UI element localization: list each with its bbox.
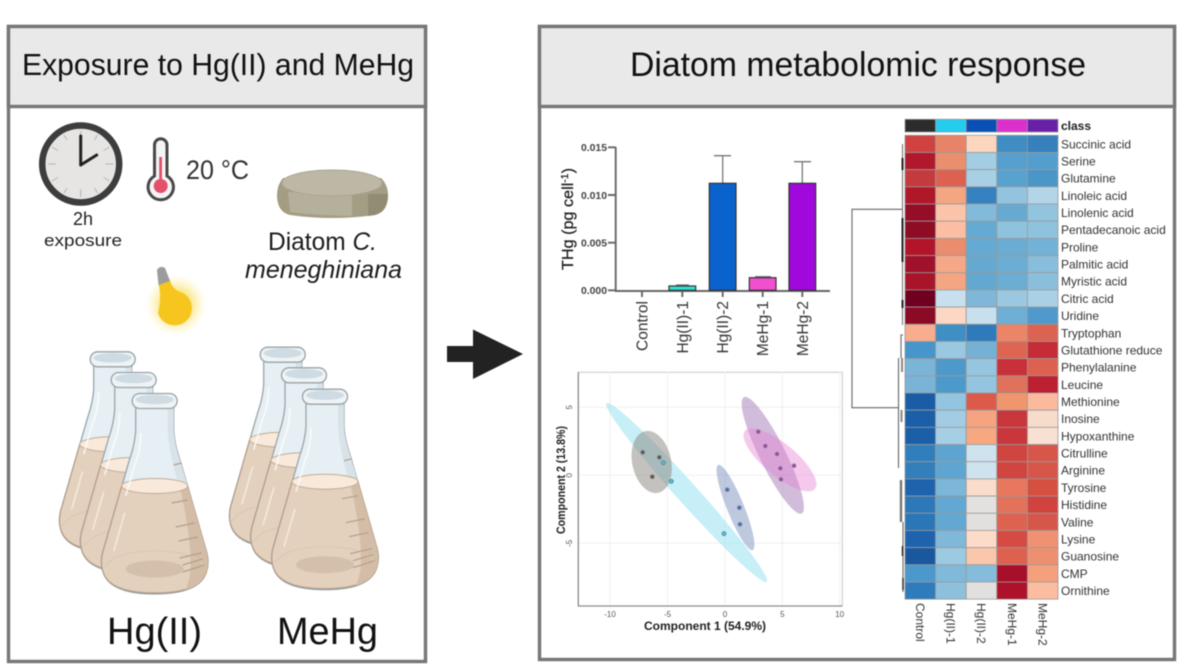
bar chart: THg per cell: 0.010 (581, 191, 607, 202)
error bars (676, 156, 811, 286)
exposure time label (44, 209, 122, 250)
metabolite labels: Serine (1061, 154, 1096, 168)
diatom species label (245, 228, 402, 284)
metabolite labels: Myristic acid (1061, 275, 1127, 289)
scatter plot: PLS-DA components (554, 372, 845, 633)
category labels: MeHg-2 (795, 301, 812, 356)
bar chart: THg per cell: 0.015 (581, 143, 607, 154)
panel: diatom metabolomic response (540, 26, 1174, 660)
treatment labels: MeHg-1 (1005, 603, 1019, 646)
scatter tick labels: -5 (565, 539, 574, 547)
metabolite labels: Linolenic acid (1061, 206, 1134, 220)
flasks: MeHg triplicate (229, 347, 378, 590)
bars (669, 183, 816, 290)
category labels: Hg(II)-2 (715, 301, 732, 354)
metabolite labels: Tryptophan (1061, 326, 1121, 340)
metabolite labels: Arginine (1061, 464, 1105, 478)
metabolite labels: Ornithine (1061, 584, 1110, 598)
bar chart: THg per cell: 0.000 (581, 286, 607, 297)
label: MeHg: MeHg (277, 611, 378, 653)
metabolite labels: Citrulline (1061, 446, 1108, 460)
treatment labels: Hg(II)-1 (944, 603, 958, 644)
scatter tick labels: -5 (664, 610, 672, 619)
exposure time label: exposure (44, 231, 122, 250)
scatter tick labels: 10 (835, 610, 845, 619)
metabolite labels: Glutamine (1061, 172, 1116, 186)
x axis title: Component 1 (54.9%) (644, 619, 766, 633)
category labels: Control (634, 301, 652, 351)
diatom species label: meneghiniana (245, 256, 402, 284)
panel header background (540, 26, 1174, 106)
icon: light bulb (145, 267, 207, 336)
metabolite labels: Inosine (1061, 412, 1100, 426)
category labels: Hg(II)-1 (675, 301, 692, 354)
heatmap: metabolites by treatment (852, 119, 1166, 646)
flasks: Hg(II) triplicate (59, 352, 208, 594)
metabolite labels: Linoleic acid (1061, 189, 1127, 203)
metabolite labels: Valine (1061, 515, 1094, 529)
metabolite labels: Leucine (1061, 378, 1103, 392)
treatment labels (913, 603, 1049, 646)
metabolite labels: Succinic acid (1061, 137, 1131, 151)
y axis title: THg (pg cell (560, 186, 577, 270)
label: Hg(II): Hg(II) (107, 611, 202, 653)
panel header background (8, 26, 426, 106)
metabolite labels: Histidine (1061, 498, 1107, 512)
metabolite labels: Citric acid (1061, 292, 1114, 306)
metabolite labels: Lysine (1061, 532, 1096, 546)
metabolite labels: Hypoxanthine (1061, 429, 1135, 443)
metabolite labels: Phenylalanine (1061, 361, 1137, 375)
icon: thermometer (148, 139, 173, 200)
metabolite labels (1061, 137, 1166, 598)
sample points (641, 430, 796, 536)
class colour bar (905, 119, 1058, 132)
y axis title: ) (560, 168, 577, 173)
y axis title: Component 2 (13.8%) (554, 426, 568, 534)
metabolite labels: Guanosine (1061, 550, 1119, 564)
metabolite labels: CMP (1061, 567, 1088, 581)
treatment labels: Hg(II)-2 (974, 603, 988, 644)
bar chart: THg per cell (560, 143, 830, 356)
bar chart: THg per cell: 0.005 (581, 238, 607, 250)
metabolite labels: Methionine (1061, 395, 1120, 409)
heading: metabolomic response: Diatom metabolomic response (630, 46, 1086, 84)
class label: class (1061, 119, 1091, 133)
scatter tick labels: 5 (780, 610, 785, 619)
scatter tick labels: 5 (565, 405, 574, 410)
category labels (634, 301, 812, 356)
icon: clock (42, 126, 119, 202)
diatom species label: Diatom C. (268, 228, 377, 256)
heading: exposure: Exposure to Hg(II) and MeHg (22, 47, 414, 82)
metabolite labels: Tyrosine (1061, 481, 1107, 495)
scatter tick labels: 0 (723, 610, 728, 619)
metabolite labels: Palmitic acid (1061, 258, 1128, 272)
y axis title: -1 (560, 173, 571, 183)
treatment labels: MeHg-2 (1035, 603, 1049, 646)
heatmap cells (905, 135, 1058, 599)
scatter tick labels: 0 (565, 473, 574, 478)
treatment labels: Control (913, 603, 927, 642)
scatter tick labels: -10 (604, 610, 616, 619)
metabolite labels: Pentadecanoic acid (1061, 223, 1166, 237)
temperature label: 20 °C (186, 155, 249, 185)
icon: diatom culture disc (277, 170, 388, 218)
scatter tick labels (565, 405, 845, 619)
panel: exposure to Hg(II) and MeHg (8, 26, 426, 662)
category labels: MeHg-1 (755, 301, 772, 356)
metabolite labels: Glutathione reduce (1061, 344, 1163, 358)
metabolite labels: Uridine (1061, 309, 1099, 323)
dendrogram (852, 144, 903, 592)
arrow: exposure to response (447, 330, 523, 379)
exposure time label: 2h (73, 209, 93, 229)
metabolite labels: Proline (1061, 240, 1099, 254)
confidence ellipses (599, 391, 825, 589)
